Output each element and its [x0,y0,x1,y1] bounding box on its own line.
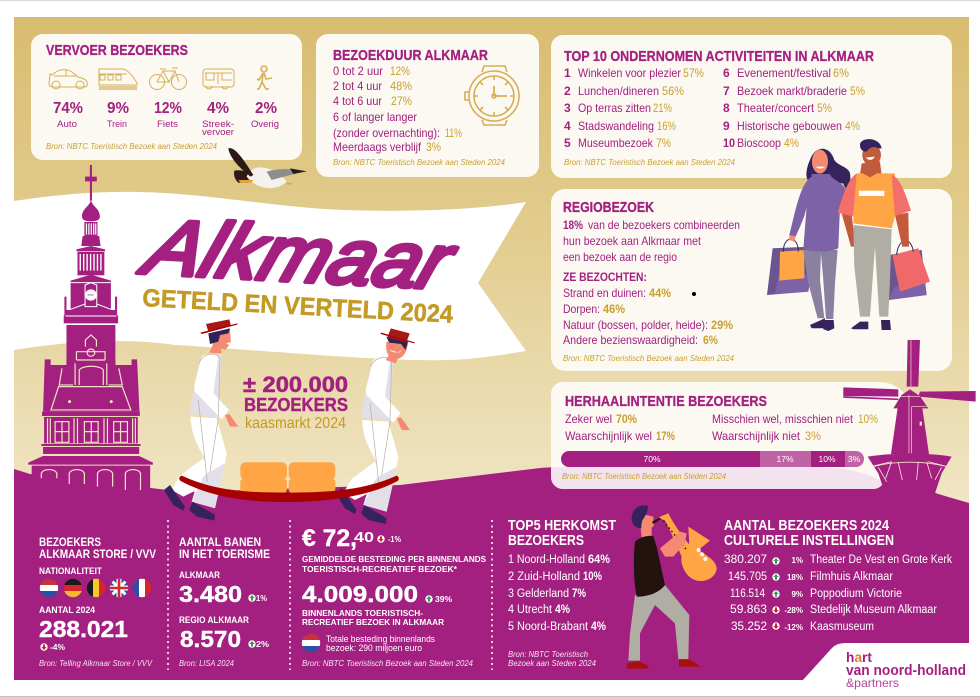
answers: 3% [805,429,821,443]
stat: trein: Trein [107,119,127,130]
stacked bar: 17% [776,454,794,464]
heading: TOP5 HERKOMST [508,518,616,534]
flags [39,578,152,598]
domestic visits [302,581,452,607]
row: poppodium: Poppodium Victorie [810,588,902,600]
activity column 1: 3 [564,101,571,115]
row: theater de vest [724,554,952,566]
stacked bar: 10% [818,454,836,464]
heading: AANTAL BANEN [179,535,261,549]
panel: alkmaar store [39,535,156,668]
region list: 29% [711,318,733,332]
duration list: Meerdaags verblijf [333,140,422,154]
spend amount: 40 [354,529,374,546]
origin list: 7% [572,588,586,600]
stacked bar [561,451,864,467]
activity column 1: 21% [653,101,672,115]
spend caption: GEMIDDELDE BESTEDING PER BINNENLANDS [302,554,486,564]
stat: streekvervoer: Streek- [202,119,234,130]
stat: streekvervoer: vervoer [202,127,234,138]
activity column 2: Theater/concert [737,101,815,115]
activity column 2: 6% [833,66,849,80]
change: -4% [50,643,65,652]
origin list: 4% [591,621,606,633]
total spend [326,634,435,653]
intro text: 18% [563,218,583,232]
stacked bar: 3% [848,454,861,464]
duration list [333,64,462,154]
activity column 2: Evenement/festival [737,66,831,80]
duration list: 0 tot 2 uur [333,64,383,78]
activity column 2: 8 [723,101,730,115]
activity column 1: Lunchen/dineren [578,84,659,98]
duration list: 27% [391,94,412,108]
stat: auto: Auto [57,119,77,130]
row: theater de vest: 380.207 [724,554,767,566]
activity column 2: Bioscoop [737,136,781,150]
duration list: 2 tot 4 uur [333,79,382,93]
activity column 2: 7 [723,84,730,98]
activity column 2: 6 [723,66,730,80]
row: kaasmuseum [731,621,874,633]
heading [724,518,894,549]
head: left carrier [200,319,237,353]
answers: Misschien wel, misschien niet [712,412,854,426]
icon: train [99,69,137,89]
alkmaar stat: 1% [256,594,267,603]
row: poppodium: 116.514 [730,588,766,600]
activity column 1: 16% [657,119,676,133]
activity column 2: 5% [817,101,832,115]
answers: Waarschijnlijk wel [565,429,652,443]
region list: Strand en duinen: [563,286,646,300]
stat: streekvervoer: 4% [207,100,229,117]
stat: trein [107,100,129,130]
icon: car [49,70,87,89]
row: stedelijk museum: Stedelijk Museum Alkmaar [810,604,937,616]
answers: 70% [616,412,637,426]
panel: top 5 herkomst [508,518,616,668]
kaasmarkt visitors: kaasmarkt 2024 [245,415,346,432]
regio stat: 8.570 [180,626,241,652]
duration list: 6 of langer langer [333,110,417,124]
stat: overig [251,100,279,130]
activity column 1: 56% [662,84,684,98]
total spend: Totale besteding binnenlands [326,634,435,644]
logo: hart van noord-holland: hart [846,649,872,665]
duration list: 3% [426,140,441,154]
answers [565,412,878,443]
region list: Natuur (bossen, polder, heide): [563,318,708,332]
store number: 288.021 [39,616,128,642]
region list: 44% [649,286,671,300]
visits caption: RECREATIEF BEZOEK IN ALKMAAR [302,617,444,627]
alkmaar stat: ALKMAAR [179,570,220,580]
activity column 1: Winkelen voor plezier [578,66,681,80]
heading [39,535,156,561]
activity column 2 [723,66,865,150]
stat: fiets: 12% [154,100,182,117]
activity column 1: 57% [683,66,704,80]
activity column 1: 1 [564,66,571,80]
activity column 1: 5 [564,136,571,150]
heading: regiobezoek: REGIOBEZOEK [563,199,654,216]
row: poppodium [730,588,902,600]
source: Bron: NBTC Toeristisch [508,650,589,659]
activity column 1: Op terras zitten [578,101,651,115]
row: kaasmuseum: 35.252 [731,621,767,633]
total spend: bezoek: 290 miljoen euro [326,643,422,653]
subtitle: GETELD EN VERTELD 2024 [142,284,454,329]
region list: 46% [603,302,625,316]
source: Bron: NBTC Toeristisch Bezoek aan Steden 2024 [563,353,734,363]
heading: IN HET TOERISME [179,547,270,561]
heading: herhaalintentie: HERHAALINTENTIE BEZOEKERS [565,393,767,410]
heading: bezoekduur: BEZOEKDUUR ALKMAAR [333,47,488,64]
row: kaasmuseum: -12% [784,623,803,632]
origin list: 10% [583,571,602,583]
logo: hart van noord-holland [846,649,966,690]
origin list [508,554,610,633]
regio stat: REGIO ALKMAAR [179,615,249,625]
stat: overig: 2% [255,100,277,117]
row: stedelijk museum [730,604,937,616]
illustration: windmill [843,340,976,493]
activity column 1 [564,66,704,150]
row: filmhuis: Filmhuis Alkmaar [810,571,893,583]
heading: AANTAL BEZOEKERS 2024 [724,518,889,534]
intro text [563,218,740,264]
stat: auto [53,100,83,130]
nationaliteit label: NATIONALITEIT [39,566,102,576]
illustration: cheese carriers [164,319,415,524]
region list: Andere bezienswaardigheid: [563,333,698,347]
visits caption: BINNENLANDS TOERISTISCH- [302,608,423,618]
answers: 10% [858,412,878,426]
heading [508,518,616,549]
subheading: ZE BEZOCHTEN: [563,270,647,284]
region list: 6% [703,333,718,347]
illustration: town hall tower [28,165,153,492]
source: Bron: Telling Alkmaar Store / VVV [39,659,153,668]
domestic visits: 4.009.000 [302,581,418,607]
icon: bus [203,69,234,89]
panel: vervoer bezoekers [31,34,302,160]
regio stat: 2% [256,640,269,649]
source: Bron: NBTC Toeristisch Bezoek aan Steden 2024 [46,141,217,151]
stat: fiets: Fiets [157,119,178,130]
domestic visits: 39% [435,594,452,604]
row: theater de vest: Theater De Vest en Grote Kerk [810,554,952,566]
spend amount [302,525,401,552]
source: Bezoek aan Steden 2024 [508,659,597,668]
heading: CULTURELE INSTELLINGEN [724,533,894,549]
spend amount: € 72, [302,525,357,552]
activity column 2: Historische gebouwen [737,119,842,133]
duration list: (zonder overnachting): [333,126,440,140]
activity column 2: 4% [845,119,860,133]
illustration: saxophone player [627,505,717,669]
row: stedelijk museum: -28% [784,606,803,615]
region list: Dorpen: [563,302,600,316]
heading: ALKMAAR STORE / VVV [39,547,156,561]
origin list: 64% [588,554,610,566]
spend caption: TOERISTISCH-RECREATIEF BEZOEK* [302,564,458,574]
spend caption [302,554,486,574]
icon: walker [257,66,272,89]
heading: vervoer: VERVOER BEZOEKERS [46,42,188,59]
alkmaar stat [179,570,267,607]
intro text: een bezoek aan de regio [563,250,677,264]
activity column 2: 5% [850,84,865,98]
activity column 1: 7% [656,136,671,150]
stat: trein: 9% [107,100,129,117]
regio stat [179,615,269,652]
spend amount: -1% [388,535,401,544]
kaasmarkt visitors [243,372,348,432]
source: Bron: NBTC Toeristisch Bezoek aan Steden 2024 [302,659,474,668]
origin list: 1 Noord-Holland [508,554,585,566]
logo: hart van noord-holland: van noord-holland [846,662,966,679]
row: filmhuis [728,571,893,583]
heading [179,535,270,561]
row: filmhuis: 145.705 [728,571,767,583]
carrier barrow [179,476,399,502]
origin list: 3 Gelderland [508,588,569,600]
activity column 1: Stadswandeling [578,119,654,133]
source: Bron: NBTC Toeristisch Bezoek aan Steden 2024 [564,157,735,167]
kaasmarkt visitors: ± 200.000 [243,372,348,397]
panel: culturele instellingen [724,518,952,633]
panel: besteding [301,525,486,668]
origin list: 4% [555,604,570,616]
intro text: hun bezoek aan Alkmaar met [563,234,702,248]
row: poppodium: 9% [791,590,803,599]
title: Alkmaar: Alkmaar [131,203,468,305]
stacked bar: 70% [643,454,661,464]
answers: 17% [656,429,675,443]
origin list: 5 Noord-Brabant [508,621,589,633]
answers: Waarschijnlijk niet [712,429,801,443]
kaasmarkt visitors: BEZOEKERS [244,395,348,415]
row: stedelijk museum: 59.863 [730,604,767,616]
duration list: 11% [445,126,462,140]
source: Bron: NBTC Toeristisch Bezoek aan Steden 2024 [562,471,726,481]
white banner flag [14,192,526,360]
row: kaasmuseum: Kaasmuseum [810,621,874,633]
heading: BEZOEKERS [508,533,584,549]
origin list: 2 Zuid-Holland [508,571,580,583]
duration list: 12% [390,64,410,78]
origin list: 4 Utrecht [508,604,553,616]
stat: fiets [154,100,182,130]
stat: streekvervoer [202,100,234,138]
source: Bron: LISA 2024 [179,659,235,668]
panel: regiobezoek [551,189,952,371]
activity column 2: Bezoek markt/braderie [737,84,847,98]
stat: overig: Overig [251,119,279,130]
activity column 1: Museumbezoek [578,136,654,150]
logo: hart van noord-holland: &partners [846,676,899,690]
aantal label: AANTAL 2024 [39,605,95,615]
source: Bron: NBTC Toeristisch Bezoek aan Steden 2024 [333,157,505,167]
illustration: shoppers [767,139,930,331]
row: filmhuis: 18% [787,573,803,582]
panel: top 10 activiteiten [551,35,952,178]
head: right carrier [380,328,415,363]
activity column 2: 4% [784,136,799,150]
panel: herhaalintentie [551,382,904,489]
region list [563,286,733,347]
panel: banen toerisme [179,535,270,668]
row: theater de vest: 1% [791,556,803,565]
alkmaar stat: 3.480 [179,581,242,607]
duration list: 48% [390,79,412,93]
icon: watch [465,66,519,125]
dotted dividers [168,520,492,670]
icon: bicycle [150,68,186,90]
source [508,650,597,668]
visits caption [302,608,444,627]
purple ground [14,463,969,680]
intro text: van de bezoekers combineerden [588,218,740,232]
icon: seagull [228,148,307,188]
icon: dutch flag [301,633,321,653]
activity column 1: 4 [564,119,571,133]
duration list: 4 tot 6 uur [333,94,382,108]
cheese [240,462,335,493]
activity column 2: 9 [723,119,730,133]
heading: top 10: TOP 10 ONDERNOMEN ACTIVITEITEN IN ALKMAAR [564,48,874,65]
activity column 2: 10 [723,136,735,150]
heading: BEZOEKERS [39,535,101,549]
activity column 1: 2 [564,84,571,98]
panel: bezoekduur [316,34,539,177]
answers: Zeker wel [565,412,612,426]
stat: auto: 74% [53,100,83,117]
